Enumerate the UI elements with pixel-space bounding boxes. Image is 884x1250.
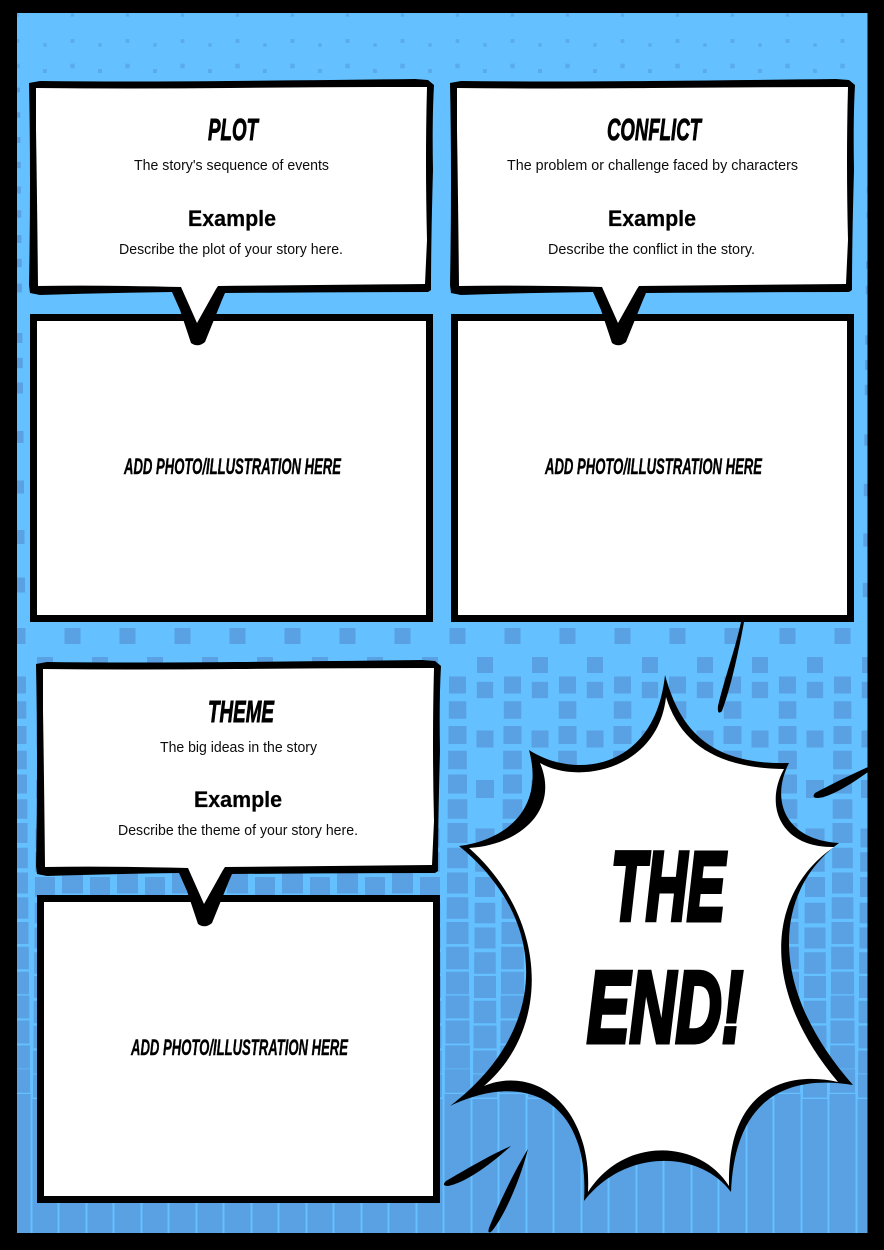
panel: plot — [29, 79, 434, 618]
icon: action line bottom left — [444, 1146, 511, 1186]
heading: conflict: CONFLICT — [607, 112, 703, 147]
icon: action line bottom — [488, 1149, 528, 1232]
photo placeholder box: ADD PHOTO/ILLUSTRATION HERE — [130, 1035, 349, 1060]
speech bubble — [450, 79, 855, 345]
example text: Describe the plot of your story here. — [119, 242, 343, 258]
heading: plot: PLOT — [208, 112, 260, 147]
burst text: the: THE — [611, 832, 727, 941]
panel: conflict — [450, 79, 855, 618]
example text: Describe the conflict in the story. — [548, 242, 755, 258]
icon: action line right — [814, 767, 868, 798]
photo placeholder box: ADD PHOTO/ILLUSTRATION HERE — [123, 454, 342, 479]
panel: theme — [36, 660, 441, 1200]
photo placeholder box — [34, 318, 430, 618]
example text: Describe the theme of your story here. — [118, 823, 358, 839]
heading: theme: THEME — [208, 694, 275, 729]
subheading: example: Example — [194, 787, 282, 812]
icon: action line top — [718, 622, 744, 713]
photo placeholder box — [40, 898, 436, 1200]
burst shape — [450, 675, 853, 1201]
speech bubble — [29, 79, 434, 345]
definition text: The problem or challenge faced by characters — [507, 158, 798, 174]
speech bubble — [36, 660, 441, 926]
burst text: end: END! — [587, 952, 743, 1064]
definition text: The story's sequence of events — [134, 158, 329, 174]
subheading: example: Example — [608, 206, 696, 231]
definition text: The big ideas in the story — [160, 740, 318, 756]
photo placeholder box — [454, 318, 850, 618]
callout: the end burst — [450, 675, 853, 1201]
subheading: example: Example — [188, 206, 276, 231]
